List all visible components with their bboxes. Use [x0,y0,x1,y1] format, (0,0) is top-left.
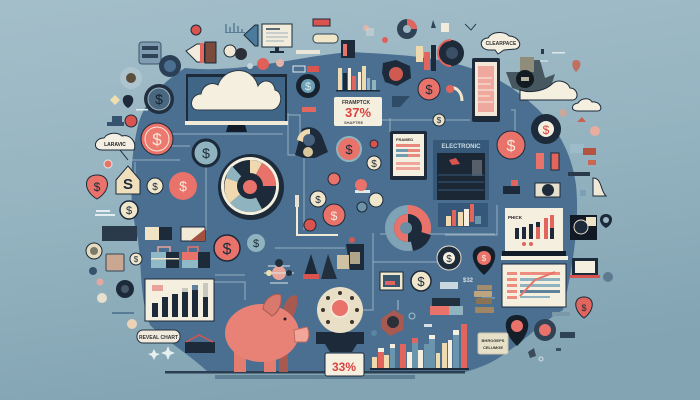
monitor chin [185,121,288,125]
teal coin: $ [253,238,259,250]
flat bar panel [430,298,463,315]
laptop chart: PHICK [508,215,523,220]
phone [472,58,500,122]
bar chart white panel [145,279,214,321]
teal coin dark ring: $ [202,145,210,161]
coin stack [474,285,494,313]
coin dark right: $ [543,123,550,137]
small left decorations [89,210,137,329]
coin cream badge [411,271,431,291]
coin cream lower [310,191,326,207]
centre top bar chart [336,66,380,92]
monitor stand [226,125,247,132]
salmon coin dark outline [214,235,240,261]
top card [262,24,292,47]
speech cloud [481,32,520,54]
tablet: FRAMED [396,137,413,142]
caption pill [137,330,180,343]
dark coin left [144,84,174,114]
donut chart large [218,154,284,220]
hat shaped chart icon [295,127,328,158]
pig ear far [283,295,297,318]
dark pin right [600,214,612,228]
connector lines [130,110,515,310]
centre coins: $ [371,159,377,170]
33% card: 33% [332,360,356,374]
dark coin badge: $ [446,254,452,265]
laptop chart [501,208,568,260]
centre coins: $ [315,195,321,206]
donut small [385,205,431,251]
electronic panel [433,140,489,200]
caption pill: REVEAL CHART [139,335,178,341]
monitor screen [186,74,287,123]
radial gauge [438,40,464,66]
small coins [224,45,236,57]
bottom right small icons [528,255,613,361]
pig legs [234,352,246,372]
small laptop [570,258,600,278]
pin dark bottom [506,315,528,346]
bell [593,178,606,196]
cream pill [313,34,338,43]
electronic panel: ELECTRONIC [442,144,481,150]
piggy bank [225,294,309,372]
pin with coin: $ [482,254,487,263]
bags row 1 [145,227,205,241]
speech cloud: CLEARPACE [486,41,517,47]
33% card [325,353,364,376]
small chips [293,66,305,72]
small dark pin [123,95,133,108]
pin with coin [473,246,495,275]
salmon pin [86,175,108,199]
ornament circle [120,67,142,89]
central blue blob [131,52,577,372]
pig body [225,304,299,362]
shopping cart [503,186,520,194]
ground shadow [165,371,465,379]
bag 1 [145,227,159,240]
bag 2 [181,227,205,241]
pig eye [284,318,286,320]
mini line chart [226,23,242,32]
coin salmon right [497,131,525,159]
chart panel under electronic [438,203,488,227]
axis L chart [295,195,338,235]
teal bags [570,144,584,153]
centre coins [304,137,383,231]
tablet [390,131,427,180]
right column icons [503,49,606,197]
salmon pin far right [576,297,592,318]
dark photo panel [570,215,597,240]
coin small left [86,243,102,259]
small circles bottom [371,300,432,336]
small chart icon [416,46,423,62]
small coin cream top [433,114,445,126]
bottom bar chart [370,324,469,370]
caption card: CELUMGE [483,345,503,350]
top centre icons [341,19,476,86]
small salmon [328,173,340,185]
37% card: FRAMPTCK [342,100,370,106]
salmon coin [169,172,197,200]
monitor with cloud [185,70,288,132]
bags row 2 [151,247,210,268]
globe icon [159,55,181,77]
teal coin [247,234,265,252]
salmon coin dark outline: $ [223,241,232,258]
coin salmon top centre: $ [425,82,433,97]
wallet card [106,254,124,271]
circle shape [446,85,454,93]
tag with dollar: S [123,176,133,193]
teal coin dark ring [193,140,219,166]
house icon [185,335,215,353]
37% card: 37% [345,105,371,120]
coin cream badge: $ [417,274,425,289]
label cloud LARAVIC [95,133,135,160]
coin salmon right: $ [507,138,516,155]
cream coin: $ [152,182,158,193]
small red circle [125,115,137,127]
small pill caption [440,282,458,289]
salmon pin: $ [94,180,101,194]
coin dark right [531,114,561,144]
server icon [139,42,161,64]
coin cream mid left: $ [126,205,132,217]
small dark panel [341,40,355,58]
coin salmon top centre [418,78,440,100]
pig snout [294,327,309,342]
card icon [380,272,403,290]
coin cream [367,156,381,170]
cream coin small: $ [134,255,139,264]
bag 4 [182,252,198,260]
cream coin small [130,253,142,265]
caption card: BHROGEPS [482,338,505,343]
37% card [334,97,382,126]
flag icon [244,25,258,46]
gear right [534,319,556,341]
cream coin [147,178,163,194]
light bulb [590,126,600,136]
robot icon [264,259,294,283]
gear bottom [381,310,404,336]
caption card [478,333,508,354]
salmon coin large [141,123,173,155]
diamond [110,95,120,105]
cloud small [572,99,601,111]
arrow hook icon [449,88,462,101]
car icon [107,116,124,126]
camera coin [535,183,560,197]
dollar label: $32 [463,278,474,284]
top left icons: $ [305,81,311,93]
salmon pin far right: $ [581,303,587,313]
ornate disc [316,287,364,352]
red tag [313,19,330,26]
money bags [303,254,337,279]
coin cream mid left [120,201,138,219]
lock icon [337,237,364,270]
37% card: SHAPTRE [344,120,363,125]
megaphone [186,44,204,62]
pig ear near [263,294,281,316]
bag 3 [151,252,166,268]
coin salmon [337,137,361,161]
small coin cream top: $ [437,116,442,125]
top left icons [120,19,338,112]
house [577,117,586,122]
dark coin badge [437,246,461,270]
salmon coin: $ [179,178,187,194]
small pink dot [104,160,112,168]
cloud right [520,81,577,100]
card small [441,23,449,32]
dark coin left: $ [155,91,163,107]
gear icon top [382,60,411,86]
sparkles [148,346,175,360]
small shield icon [392,96,410,107]
cloud [192,70,281,110]
centre coins: $ [331,209,338,223]
centre coins: $ [345,142,353,157]
label cloud LARAVIC: LARAVIC [104,142,126,148]
tag with dollar [116,166,140,194]
coin salmon lower [323,204,345,226]
dark cursor cross [506,57,555,96]
data table panel [502,264,566,307]
salmon coin large: $ [152,130,162,149]
small red cards [536,153,544,169]
small donut top [397,19,417,39]
dark toolbar [102,226,137,241]
dark dial [116,280,134,298]
